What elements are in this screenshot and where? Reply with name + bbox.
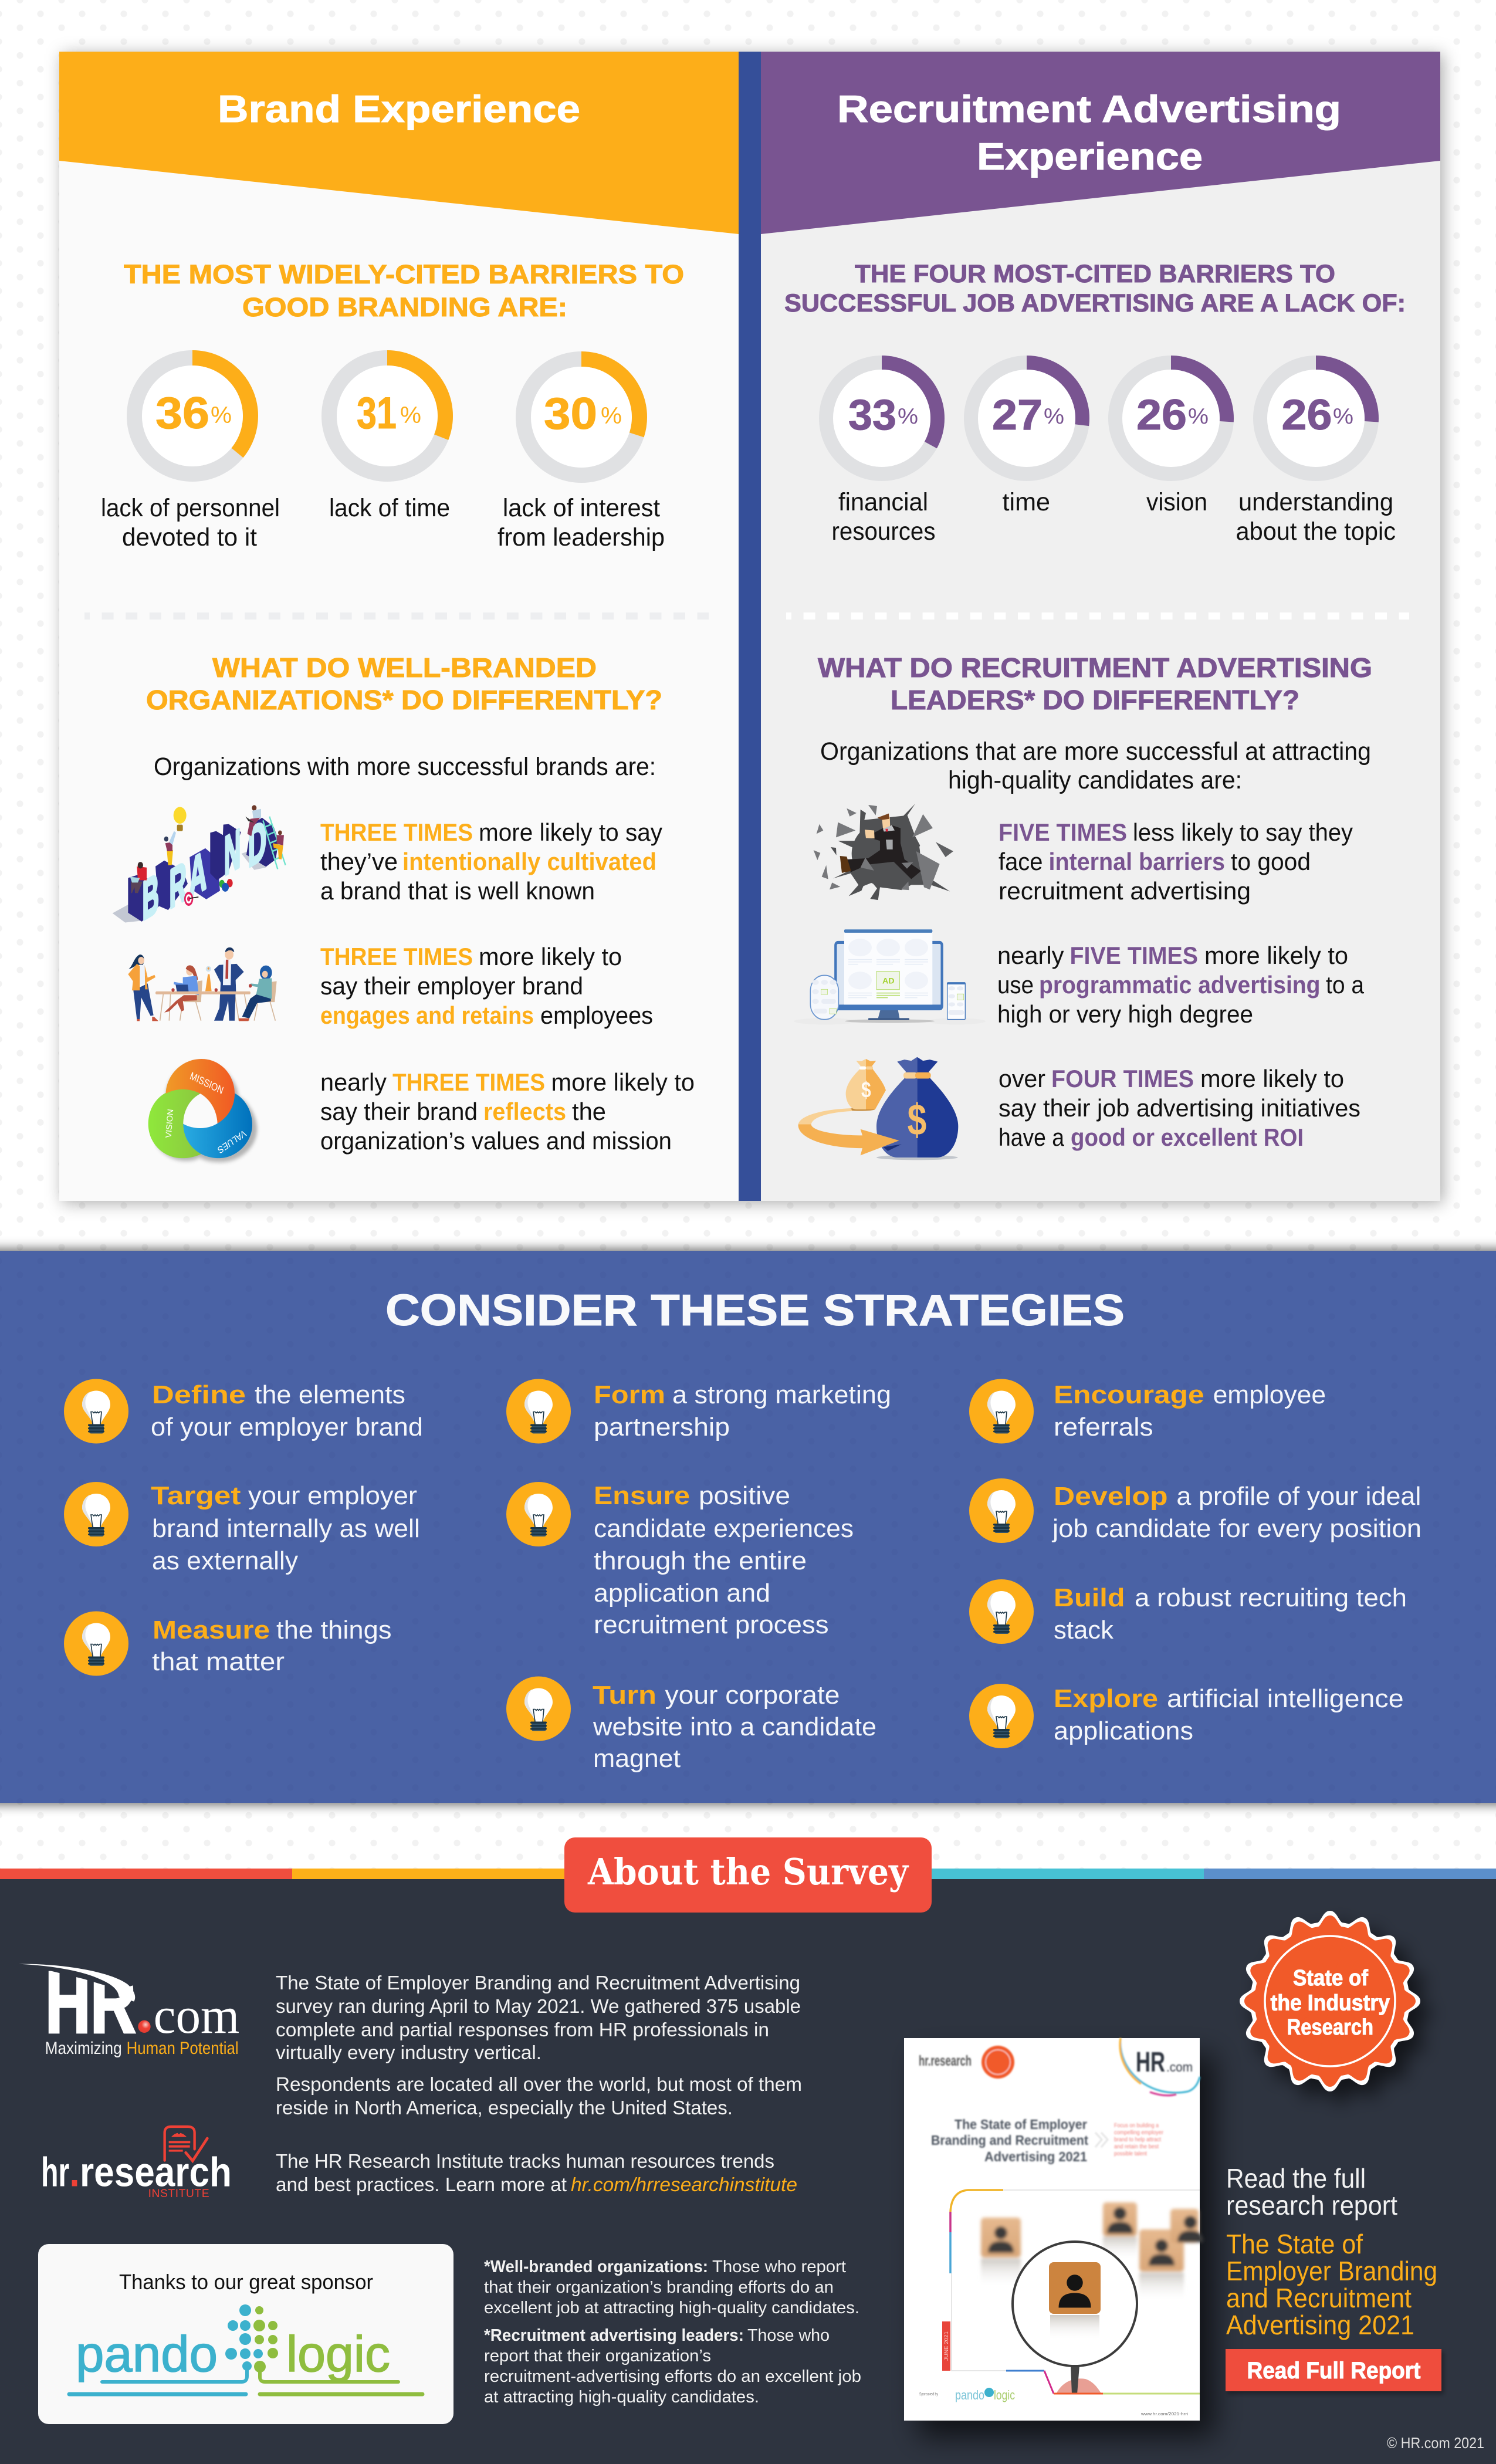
icon: brand letters illustration: D [248, 808, 266, 879]
donut chart: 36 percent: 36 [155, 388, 209, 438]
cover: report title [931, 2117, 1164, 2164]
cover: footer lines and sponsor: pando [955, 2388, 984, 2402]
text: read the full report: research report [1226, 2190, 1397, 2221]
text: three times engages and retains: say their employer brand [320, 972, 583, 1000]
label: financial resources: financial [838, 488, 928, 516]
icon: programmatic advertising devices: AD [882, 977, 895, 986]
text: definitions footnotes: that their organization’s branding efforts do an [484, 2278, 834, 2297]
donut chart: 30 percent: % [601, 403, 622, 429]
heading: recruitment advertising title: Experience [977, 135, 1203, 178]
cover: footer lines and sponsor: logic [994, 2388, 1015, 2402]
text: three times engages and retains: more likely to [479, 943, 622, 970]
label: lack of personnel [101, 494, 280, 551]
cover: logos: .com [1166, 2060, 1193, 2074]
donut chart: 26 percent vision [1115, 363, 1227, 474]
badge: state of the industry research: the Industry [1271, 1991, 1390, 2016]
heading: well-branded organizations [146, 652, 662, 715]
heading: about the survey: About the Survey [587, 1850, 909, 1893]
logo: pando logic [69, 2304, 422, 2394]
heading: job advertising barriers [784, 260, 1406, 317]
text: report title: Advertising 2021 [1226, 2310, 1414, 2340]
heading: recruitment advertising title [837, 87, 1341, 178]
strategy: form [506, 1379, 891, 1443]
panel: about the survey footer [0, 1837, 1496, 2464]
label: vision: vision [1146, 488, 1207, 516]
text: survey description: reside in North America, especially the United States. [276, 2097, 733, 2118]
strategy: encourage [969, 1379, 1326, 1443]
header band: brand experience [59, 52, 739, 234]
strategy: target: brand internally as well [152, 1514, 420, 1543]
donut chart: 30 percent: 30 [544, 389, 597, 439]
donut chart: 31 percent: 31 [357, 388, 397, 438]
text: survey description: virtually every industry vertical. [276, 2042, 541, 2063]
badge: state of the industry research [1240, 1911, 1420, 2091]
text: definitions footnotes: report that their organization’s [484, 2347, 711, 2365]
heading: branding barriers: THE MOST WIDELY-CITED BARRIERS TO [124, 259, 684, 289]
text: three times well known: more likely to say [479, 818, 662, 846]
heading: brand experience title: Brand Experience [218, 87, 580, 130]
strategy: build: stack [1054, 1616, 1114, 1644]
donut chart: 26 percent understanding: 26 [1281, 391, 1332, 439]
text: definitions footnotes: *Well-branded organizations: [484, 2257, 708, 2276]
strategy: ensure: through the entire [594, 1546, 807, 1575]
text: hr research institute description: and best practices. Learn more at [276, 2174, 567, 2195]
label: lack of interest [497, 494, 665, 551]
label: lack of time: lack of time [329, 494, 450, 522]
strategy: measure: Measure [153, 1616, 270, 1644]
strategy: target: your employer [248, 1481, 417, 1510]
cover: magnifying glass [1013, 2242, 1137, 2394]
logo: hr.research institute: research [80, 2149, 232, 2195]
icon: money bags with return arrow: $ [908, 1095, 926, 1145]
donut chart: 26 percent understanding: % [1333, 404, 1353, 429]
text: five times internal barriers: recruitment advertising [999, 877, 1251, 905]
strategy: measure: the things [276, 1616, 392, 1644]
heading: recruitment advertising leaders [818, 652, 1372, 715]
donut chart: 33 percent: 33 [848, 391, 896, 439]
divider column [739, 52, 761, 1201]
text: nearly five times programmatic: nearly [997, 942, 1064, 969]
cover: report title: and retain the best [1114, 2144, 1159, 2150]
donut chart: 31 percent [329, 358, 445, 474]
text: three times well known: they’ve [320, 848, 398, 875]
text: read the full report [1226, 2163, 1397, 2221]
label: time: time [1002, 488, 1050, 516]
text: definitions footnotes: at attracting high-quality candidates. [484, 2388, 759, 2407]
strategy: build: Build [1054, 1583, 1125, 1612]
panel shadow [62, 54, 1443, 1203]
strategy: define [64, 1379, 423, 1443]
strategy: define: Define [152, 1380, 246, 1409]
button: read full report: Read Full Report [1247, 2358, 1421, 2384]
text: nearly five times programmatic: use [997, 971, 1034, 999]
heading: about the survey [564, 1837, 932, 1913]
strategy: encourage: referrals [1054, 1413, 1153, 1441]
donut chart: 26 percent vision: % [1188, 404, 1209, 429]
text: three times well known: THREE TIMES [320, 818, 473, 846]
icon: brand letters illustration: B [143, 862, 159, 932]
text: survey description: The State of Employer Branding and Recruitment Advertising [276, 1972, 800, 1993]
strategy: target: as externally [152, 1546, 298, 1575]
heading: well-branded organizations: WHAT DO WELL-BRANDED [212, 652, 597, 683]
badge: state of the industry research: State of [1293, 1966, 1368, 1991]
text: over four times roi: good or excellent ROI [1071, 1123, 1304, 1151]
text: five times internal barriers: less likely to say they [1133, 818, 1353, 846]
text: hr research institute description: The HR Research Institute tracks human resources trends [276, 2150, 774, 2172]
text: hr research institute description: hr.com/hrresearchinstitute [571, 2174, 797, 2195]
strategy: explore: Explore [1054, 1684, 1158, 1713]
strategy: build [969, 1579, 1407, 1644]
text: nearly three times values and mission: nearly [320, 1068, 387, 1096]
icon: mission vision values rings: MISSION [188, 1070, 225, 1096]
strategy: turn: your corporate [665, 1681, 840, 1710]
strategy: turn: magnet [593, 1744, 681, 1773]
strategy: ensure: application and [594, 1579, 770, 1607]
donut chart: 33 percent: % [898, 404, 918, 429]
text: five times internal barriers: internal barriers [1049, 848, 1225, 875]
text: report title: The State of [1226, 2229, 1363, 2259]
heading: recruitment advertising title: Recruitment Advertising [837, 87, 1341, 130]
label: understanding about the topic: understanding [1238, 488, 1393, 516]
icon: brand letters illustration: R [170, 850, 187, 920]
strategy: explore: artificial intelligence [1167, 1684, 1404, 1713]
text: organizations intro: Organizations with more successful brands are: [154, 753, 656, 781]
cover: report title: compelling employer [1114, 2130, 1164, 2136]
strategy: turn [506, 1677, 876, 1773]
header band: recruitment advertising [761, 52, 1440, 234]
heading: branding barriers [124, 259, 684, 322]
strategy: ensure: candidate experiences [594, 1514, 854, 1543]
logo: HR.com: Human Potential [127, 2039, 239, 2058]
label: understanding about the topic: about the topic [1236, 517, 1396, 546]
panel: recruitment advertising experience [761, 52, 1440, 1201]
donut chart: 36 percent [134, 358, 251, 474]
text: survey description [276, 1972, 802, 2118]
icon: programmatic advertising devices [794, 929, 986, 1024]
text: nearly five times programmatic: more likely to [1204, 942, 1348, 969]
text: survey description: Respondents are located all over the world, but most of them [276, 2073, 802, 2095]
text: nearly three times values and mission: reflects [483, 1098, 566, 1125]
heading: branding barriers: GOOD BRANDING ARE: [242, 292, 567, 322]
band shadow [0, 1248, 1496, 1805]
text: over four times roi: FOUR TIMES [1051, 1065, 1194, 1092]
icon: mission vision values rings: VALUES [216, 1128, 248, 1155]
report cover [904, 2038, 1203, 2421]
text: high-quality candidates intro [820, 737, 1371, 794]
text: nearly three times values and mission: THREE TIMES [392, 1068, 545, 1096]
text: five times internal barriers [999, 818, 1353, 905]
strategy: build: a robust recruiting tech [1135, 1583, 1407, 1612]
donut chart: 33 percent [826, 363, 937, 474]
cover: report title: Focus on building a [1114, 2123, 1159, 2129]
text: nearly three times values and mission: the [572, 1098, 606, 1125]
text: three times well known [320, 818, 662, 905]
text: report title [1226, 2229, 1437, 2340]
strategy: explore [969, 1684, 1404, 1748]
panel: consider these strategies [0, 1251, 1496, 1803]
cover: logos [919, 2038, 1200, 2096]
text: copyright: © HR.com 2021 [1387, 2434, 1484, 2452]
heading: recruitment advertising leaders: WHAT DO RECRUITMENT ADVERTISING [818, 652, 1372, 683]
text: report title: and Recruitment [1226, 2283, 1412, 2313]
logo: hr.research institute: . [69, 2149, 80, 2195]
text: five times internal barriers: face [999, 848, 1043, 875]
text: definitions footnotes: recruitment-advertising efforts do an excellent job [484, 2367, 861, 2386]
cover: footer lines and sponsor: www.hr.com/2021-hrri [1140, 2412, 1189, 2416]
text: read the full report: Read the full [1226, 2163, 1366, 2194]
cover: report title: The State of Employer [955, 2117, 1087, 2132]
logo: hr.research institute [41, 2127, 232, 2200]
cover: photo frame and blocks [942, 2190, 1203, 2371]
icon: brand letters illustration [113, 805, 286, 932]
strategy: encourage: employee [1213, 1380, 1326, 1409]
text: nearly three times values and mission: more likely to [551, 1068, 695, 1096]
text: five times internal barriers: FIVE TIMES [999, 818, 1127, 846]
panel: brand experience [59, 52, 739, 1201]
logo: hr.research institute: INSTITUTE [148, 2188, 209, 2200]
text: nearly five times programmatic [997, 942, 1365, 1028]
text: hr research institute description [276, 2150, 797, 2195]
text: survey description: complete and partial responses from HR professionals in [276, 2019, 769, 2040]
cover: logos: hr.research [919, 2053, 972, 2069]
text: nearly five times programmatic: high or very high degree [997, 1000, 1253, 1028]
badge: state of the industry research: Research [1287, 2015, 1373, 2040]
strategy: form: a strong marketing [672, 1380, 891, 1409]
strategy: define: the elements [255, 1380, 405, 1409]
text: over four times roi: say their job advertising initiatives [999, 1094, 1360, 1122]
text: high-quality candidates intro: high-quality candidates are: [948, 766, 1242, 794]
strategy: ensure: Ensure [594, 1481, 690, 1510]
text: definitions footnotes: Those who report [712, 2257, 846, 2276]
icon: team meeting illustration [128, 947, 277, 1021]
text: definitions footnotes: *Recruitment advertising leaders: [484, 2326, 744, 2345]
text: five times internal barriers: to good [1231, 848, 1311, 875]
icon: mission vision values rings [148, 1059, 257, 1162]
text: over four times roi: have a [999, 1123, 1065, 1151]
logo: HR.com: HR [45, 1954, 136, 2051]
donut chart: 31 percent: % [400, 402, 421, 428]
logo: pando logic: pando [76, 2326, 218, 2382]
icon: businessman breaking wall [814, 804, 953, 900]
icon: money bags with return arrow: $ [861, 1077, 871, 1102]
text: three times engages and retains: THREE TIMES [320, 943, 473, 970]
strategy: measure: that matter [152, 1647, 285, 1676]
donut chart: 30 percent [523, 359, 639, 475]
donut chart: 26 percent vision: 26 [1136, 391, 1187, 439]
donut chart: 27 percent: 27 [992, 391, 1043, 439]
strategy: develop: Develop [1054, 1482, 1167, 1511]
strategy: develop: job candidate for every position [1051, 1514, 1421, 1543]
strategy: turn: website into a candidate [593, 1712, 876, 1741]
heading: recruitment advertising leaders: LEADERS* DO DIFFERENTLY? [891, 685, 1299, 715]
heading: well-branded organizations: ORGANIZATIONS* DO DIFFERENTLY? [146, 685, 662, 715]
text: nearly five times programmatic: programmatic advertising [1039, 971, 1320, 999]
label: financial resources [832, 488, 935, 546]
text: report title: Employer Branding [1226, 2256, 1437, 2286]
donut chart: 27 percent: % [1044, 404, 1064, 429]
logo: HR.com [19, 1954, 239, 2058]
cover: report title: Branding and Recruitment [931, 2133, 1088, 2148]
label: lack of personnel: lack of personnel [101, 494, 280, 522]
cover: footer lines and sponsor: Sponsored by [919, 2392, 938, 2397]
heading: job advertising barriers: THE FOUR MOST-CITED BARRIERS TO [855, 260, 1335, 288]
text: three times well known: a brand that is well known [320, 877, 595, 905]
icon: money bags with return arrow [798, 1057, 958, 1160]
strategy: develop: a profile of your ideal [1176, 1482, 1421, 1511]
strategy: encourage: Encourage [1054, 1380, 1204, 1409]
strategy: ensure [506, 1481, 854, 1639]
heading: job advertising barriers: SUCCESSFUL JOB ADVERTISING ARE A LACK OF: [784, 289, 1406, 317]
text: three times engages and retains: engages and retains [320, 1001, 534, 1029]
text: sponsor thanks: Thanks to our great sponsor [119, 2270, 373, 2294]
text: three times well known: intentionally cultivated [402, 848, 656, 875]
text: over four times roi: more likely to [1200, 1065, 1344, 1092]
cover: report title: possible talent [1114, 2151, 1147, 2157]
text: nearly five times programmatic: FIVE TIMES [1070, 942, 1198, 969]
heading: consider these strategies: CONSIDER THESE STRATEGIES [385, 1285, 1125, 1335]
strategy: turn: Turn [593, 1681, 656, 1710]
text: three times engages and retains: employees [540, 1001, 653, 1029]
text: definitions footnotes: Those who [747, 2326, 830, 2345]
strategy: form: partnership [594, 1413, 730, 1441]
cover: footer lines and sponsor [919, 2371, 1200, 2416]
logo: HR.com: com [154, 1987, 239, 2045]
strategy: define: of your employer brand [151, 1413, 423, 1441]
text: nearly five times programmatic: to a [1326, 971, 1365, 999]
donut chart: 27 percent [971, 363, 1082, 474]
strategy: target [64, 1481, 420, 1575]
text: nearly three times values and mission: organization’s values and mission [320, 1127, 672, 1155]
donut chart: 26 percent understanding [1260, 363, 1372, 474]
text: nearly three times values and mission: say their brand [320, 1098, 478, 1125]
button: read full report [1226, 2349, 1441, 2391]
strategy: measure [64, 1611, 392, 1676]
cover: photo frame and blocks: JUNE 2021 [943, 2331, 949, 2361]
icon: mission vision values rings: VISION [164, 1109, 175, 1139]
strategy: target: Target [151, 1481, 241, 1510]
donut chart: 36 percent: % [211, 402, 232, 428]
logo: HR.com: Maximizing [45, 2039, 122, 2058]
strategy: form: Form [594, 1380, 665, 1409]
text: three times engages and retains [320, 943, 653, 1029]
cover: report title: brand to help attract [1114, 2137, 1161, 2143]
strategy: develop [969, 1478, 1421, 1543]
icon: brand letters illustration: N [224, 817, 241, 888]
text: survey description: survey ran during April to May 2021. We gathered 375 usable [276, 1995, 801, 2017]
cover: report title: Advertising 2021 [984, 2149, 1087, 2164]
text: high-quality candidates intro: Organizations that are more successful at attracting [820, 737, 1371, 766]
label: financial resources: resources [832, 517, 935, 546]
label: lack of interest: lack of interest [503, 494, 660, 522]
label: lack of interest: from leadership [497, 523, 665, 551]
logo: pando logic: logic [286, 2326, 390, 2382]
strategy: ensure: recruitment process [594, 1610, 828, 1639]
text: nearly three times values and mission [320, 1068, 695, 1155]
strategy: explore: applications [1054, 1717, 1193, 1745]
strategy: ensure: positive [699, 1481, 790, 1510]
text: over four times roi [999, 1065, 1360, 1151]
text: definitions footnotes [484, 2257, 861, 2407]
icon: brand letters illustration: A [189, 839, 207, 910]
panel: sponsor [38, 2244, 453, 2424]
text: over four times roi: over [999, 1065, 1045, 1092]
cover: logos: HR [1136, 2047, 1165, 2078]
text: definitions footnotes: excellent job at attracting high-quality candidates. [484, 2299, 859, 2317]
label: lack of personnel: devoted to it [122, 523, 257, 551]
logo: hr.research institute: hr [41, 2149, 69, 2195]
label: understanding about the topic [1236, 488, 1396, 546]
